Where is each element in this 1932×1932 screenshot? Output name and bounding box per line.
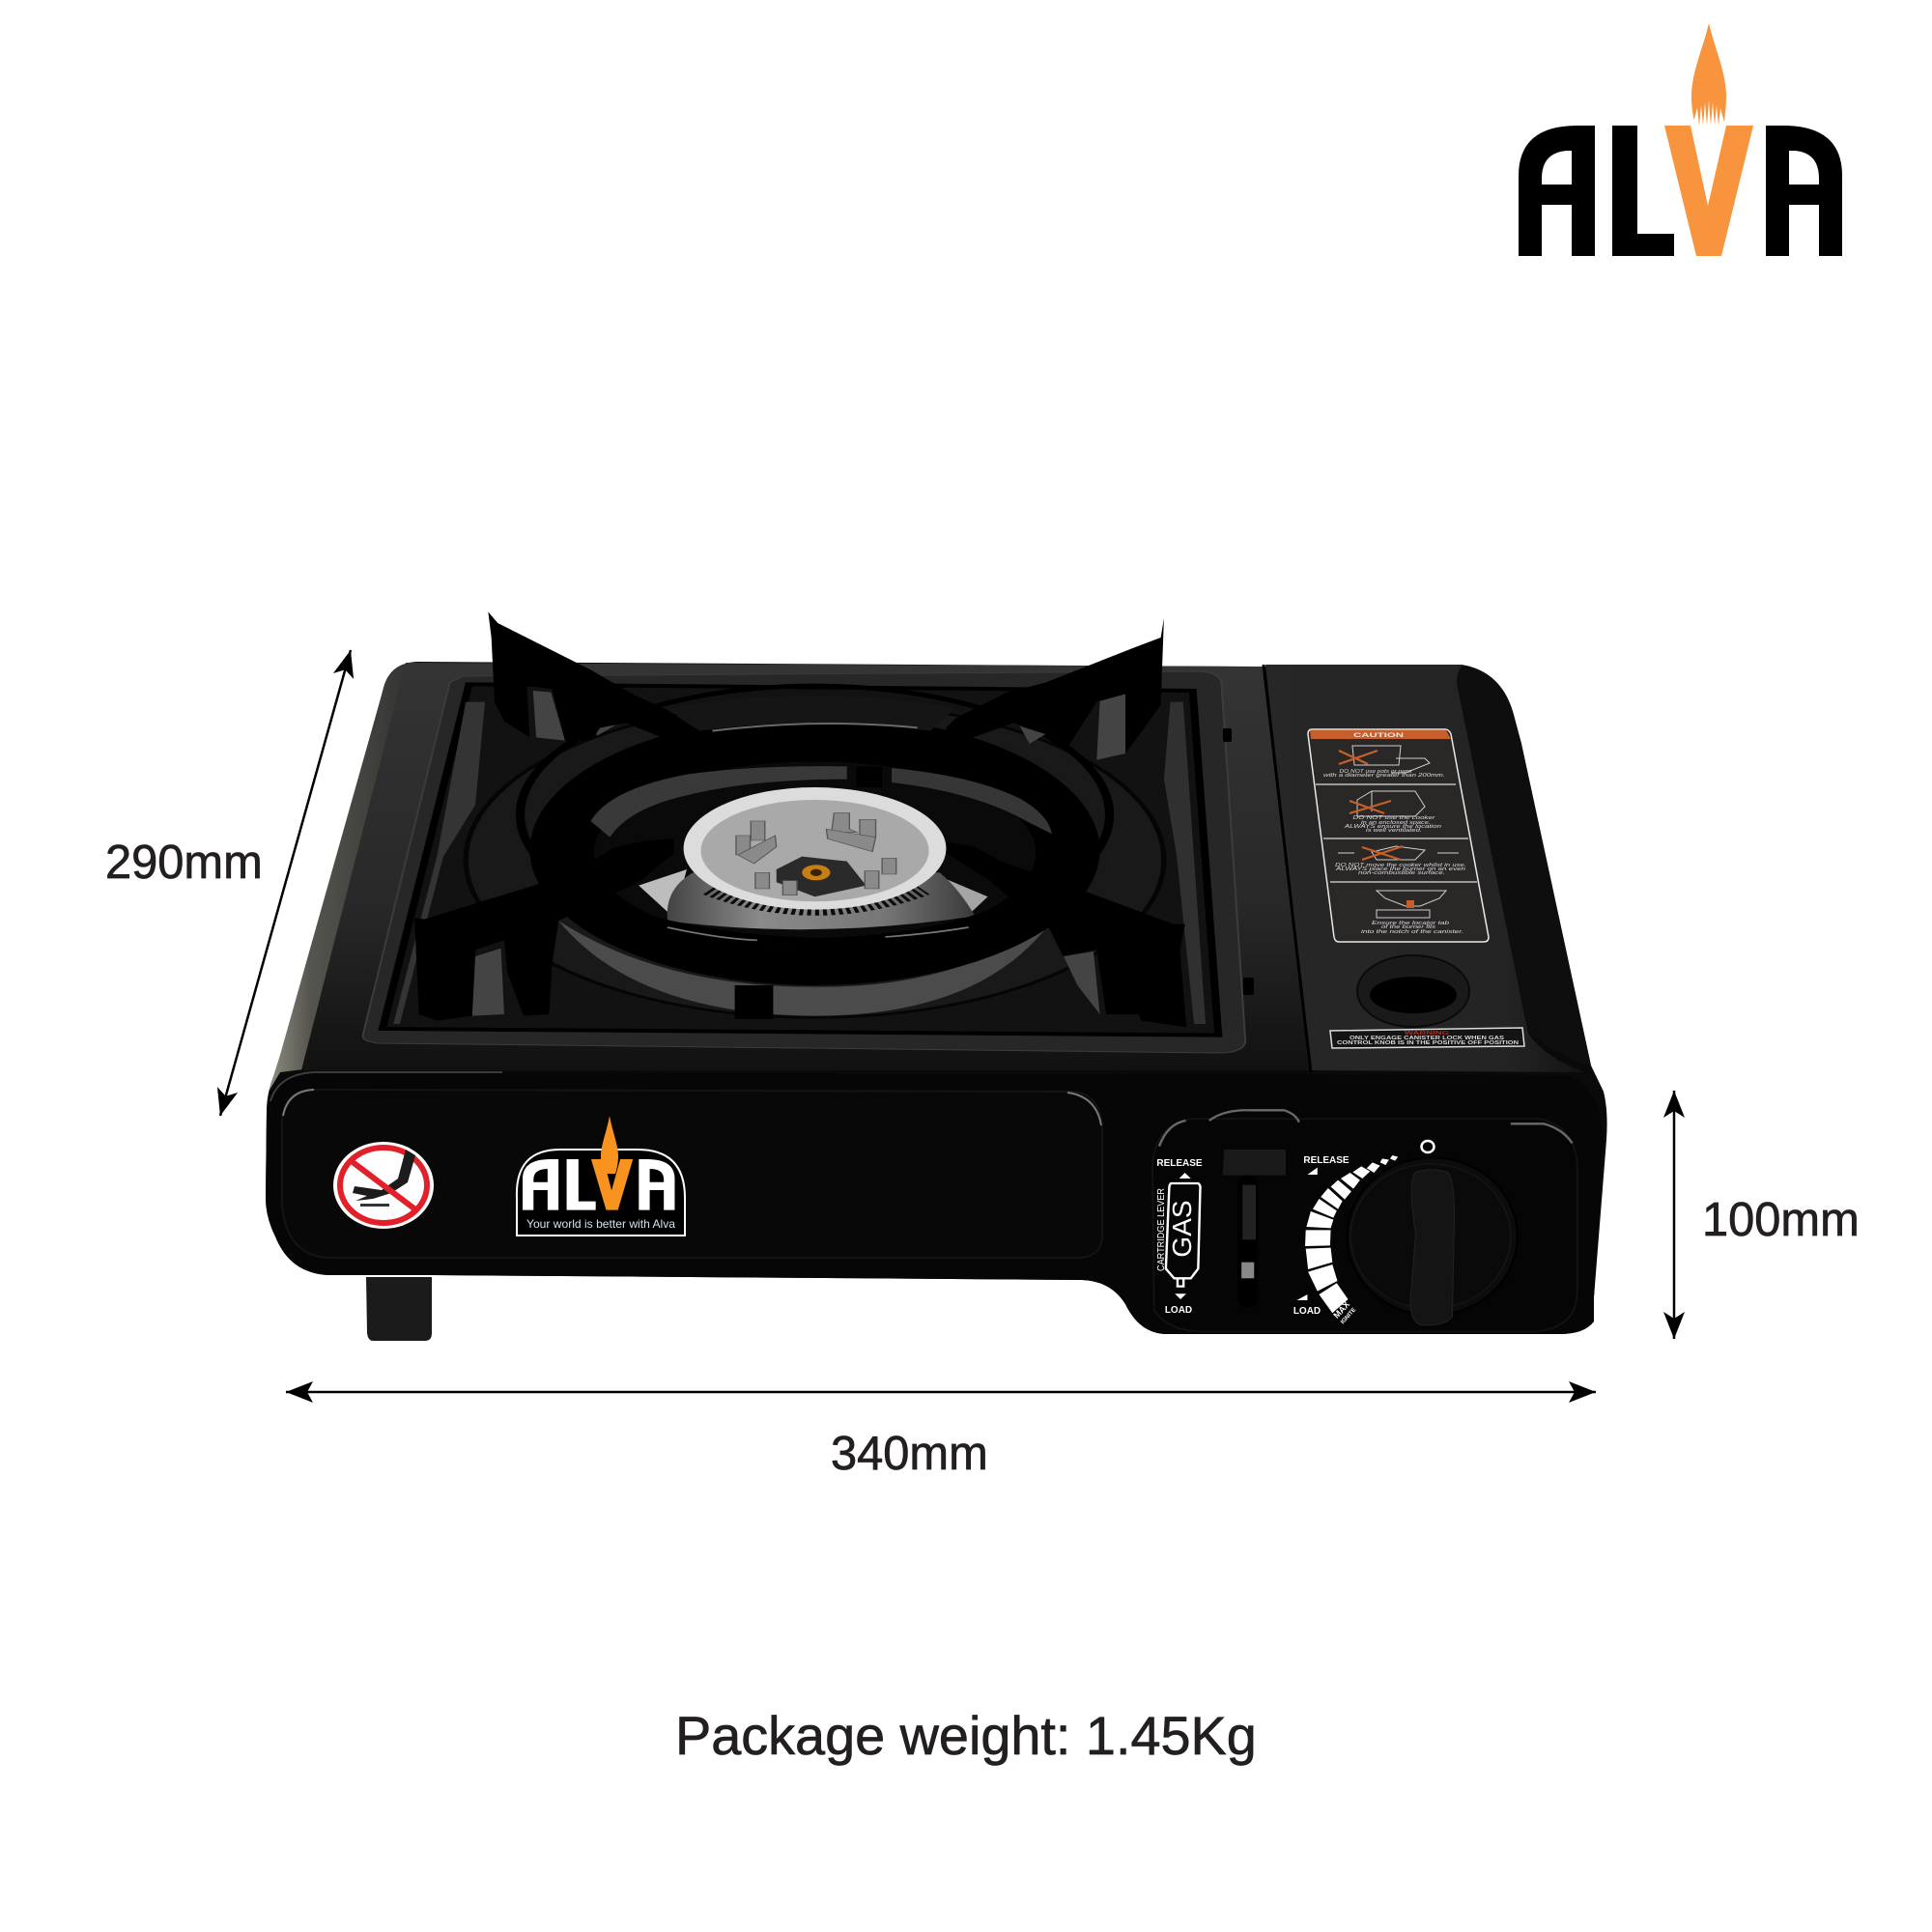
label text: of the burner fits	[1381, 924, 1436, 930]
package weight: Package weight: 1.45Kg	[675, 1705, 1257, 1766]
label text: DO NOT move the cooker whilst in use.	[1335, 863, 1466, 868]
caution heading: CAUTION	[1353, 733, 1404, 739]
lever slider	[1223, 1150, 1286, 1176]
warning label: WARNING	[1405, 1031, 1449, 1037]
knob	[1350, 1164, 1511, 1309]
arrow: width 340mm	[286, 1381, 1596, 1403]
logo letter A	[1519, 126, 1595, 256]
front ring lip	[584, 896, 1023, 942]
recess crescent front	[558, 921, 1052, 1016]
label: 100mm: 100mm	[1702, 1194, 1860, 1246]
burner centre	[777, 857, 867, 896]
top surface left	[301, 663, 1311, 1070]
label panel	[1308, 729, 1489, 942]
caution label	[1308, 729, 1489, 942]
tray glints	[472, 691, 1138, 1016]
logo letter A right	[1766, 126, 1842, 256]
brand badge	[517, 1116, 685, 1236]
control panel	[1152, 1110, 1577, 1331]
logo letter V	[1664, 126, 1753, 256]
label text: DO NOT use pots or pans	[1339, 769, 1412, 775]
label text: is well ventilated.	[1366, 828, 1422, 834]
gas label: GAS	[1167, 1200, 1197, 1258]
lid	[1265, 665, 1584, 1072]
label icons	[1338, 746, 1459, 918]
ring body	[529, 715, 1100, 985]
gas canister icon	[1166, 1183, 1201, 1287]
flame scale	[1305, 1155, 1398, 1313]
label text: non-combustible surface.	[1358, 870, 1445, 876]
badge tagline: Your world is better with Alva	[526, 1217, 675, 1231]
locator mark	[1406, 900, 1414, 908]
metal plate right	[946, 879, 988, 918]
lid slots	[1223, 728, 1254, 995]
stove	[266, 611, 1607, 1341]
label crosses	[1339, 751, 1403, 860]
triangles	[1175, 1168, 1318, 1300]
recess	[466, 702, 1164, 1017]
arrow: depth 290mm	[210, 647, 361, 1119]
panel seam	[1264, 665, 1311, 1072]
front face	[266, 1072, 1604, 1334]
max ignite label	[1331, 1299, 1357, 1325]
control panel plate	[1152, 1119, 1577, 1331]
label text: ALWAYS ensure the location	[1343, 824, 1441, 830]
burner ports	[736, 813, 896, 895]
ring lip highlight	[712, 724, 918, 731]
sign: do not touch	[333, 1142, 434, 1229]
tray interior	[383, 684, 1218, 1036]
knob seat	[1348, 1157, 1518, 1316]
off mark	[1422, 1141, 1434, 1152]
tray reflection right	[1164, 702, 1206, 1024]
label: 290mm: 290mm	[105, 837, 263, 889]
panel highlight	[1159, 1110, 1573, 1147]
basin crescent left	[590, 766, 847, 838]
warning label	[1330, 1028, 1524, 1048]
cartridge lever label: CARTRIDGE LEVER	[1156, 1188, 1167, 1271]
warning label: ONLY ENGAGE CANISTER LOCK WHEN GAS	[1350, 1036, 1505, 1041]
load label right: LOAD	[1293, 1306, 1321, 1317]
tray frame	[363, 671, 1245, 1053]
pan support front left	[414, 838, 674, 1021]
metal plate left	[639, 869, 687, 918]
pan support front right	[946, 842, 1186, 1027]
basin crescent right	[892, 768, 1052, 834]
badge flame	[601, 1116, 618, 1174]
label header	[1310, 730, 1451, 739]
stove left edge	[269, 663, 435, 1092]
warning label: CONTROL KNOB IS IN THE POSITIVE OFF POSITION	[1337, 1040, 1520, 1046]
label text: ALWAYS place the burner on an even	[1334, 867, 1465, 872]
label text: with a diameter greater than 200mm.	[1323, 773, 1445, 779]
label: 340mm: 340mm	[831, 1428, 988, 1480]
burner ring	[684, 787, 946, 910]
stove body silhouette	[266, 662, 1607, 1334]
burner disc	[700, 800, 929, 901]
front plate	[282, 1090, 1102, 1258]
arrow: height 100mm	[1663, 1091, 1685, 1339]
ring top lip	[521, 686, 1110, 944]
badge letters	[523, 1159, 674, 1210]
knob handle	[1410, 1170, 1454, 1325]
label text: DO NOT use the cooker	[1352, 815, 1435, 821]
logo letter L	[1612, 126, 1674, 256]
front ring highlight	[668, 927, 969, 940]
load label left: LOAD	[1165, 1305, 1192, 1316]
front plate corner highlight	[283, 1090, 1101, 1125]
lever slot	[1237, 1176, 1258, 1307]
ring top band	[668, 696, 955, 731]
foot	[366, 1277, 432, 1341]
badge outline	[517, 1150, 685, 1236]
brass jet	[802, 865, 830, 880]
basin	[594, 761, 1036, 945]
pan support back right	[946, 618, 1164, 753]
burner tray	[363, 611, 1245, 1053]
canister vent hole	[1357, 955, 1469, 1027]
lid right edge	[1457, 666, 1591, 1065]
front top edge highlight	[270, 1072, 502, 1101]
burner teeth	[709, 891, 923, 910]
hand icon	[353, 1150, 415, 1201]
logo: ALVA	[1519, 23, 1842, 256]
label text: Ensure the locator tab	[1372, 921, 1449, 926]
release label left: RELEASE	[1156, 1158, 1203, 1169]
label text: into the notch of the canister.	[1361, 929, 1463, 935]
label text	[1323, 769, 1466, 935]
feet on ring	[735, 766, 882, 1019]
release label right: RELEASE	[1303, 1155, 1350, 1166]
logo flame	[1691, 23, 1726, 126]
tray reflection left	[393, 702, 485, 1024]
pan support back left	[488, 611, 695, 751]
max ignite label: IGNITE	[1340, 1307, 1357, 1325]
max ignite label: MAX	[1331, 1299, 1351, 1321]
label text: in an enclosed space.	[1361, 820, 1431, 826]
label dividers	[1316, 784, 1477, 882]
burner base	[668, 872, 975, 929]
